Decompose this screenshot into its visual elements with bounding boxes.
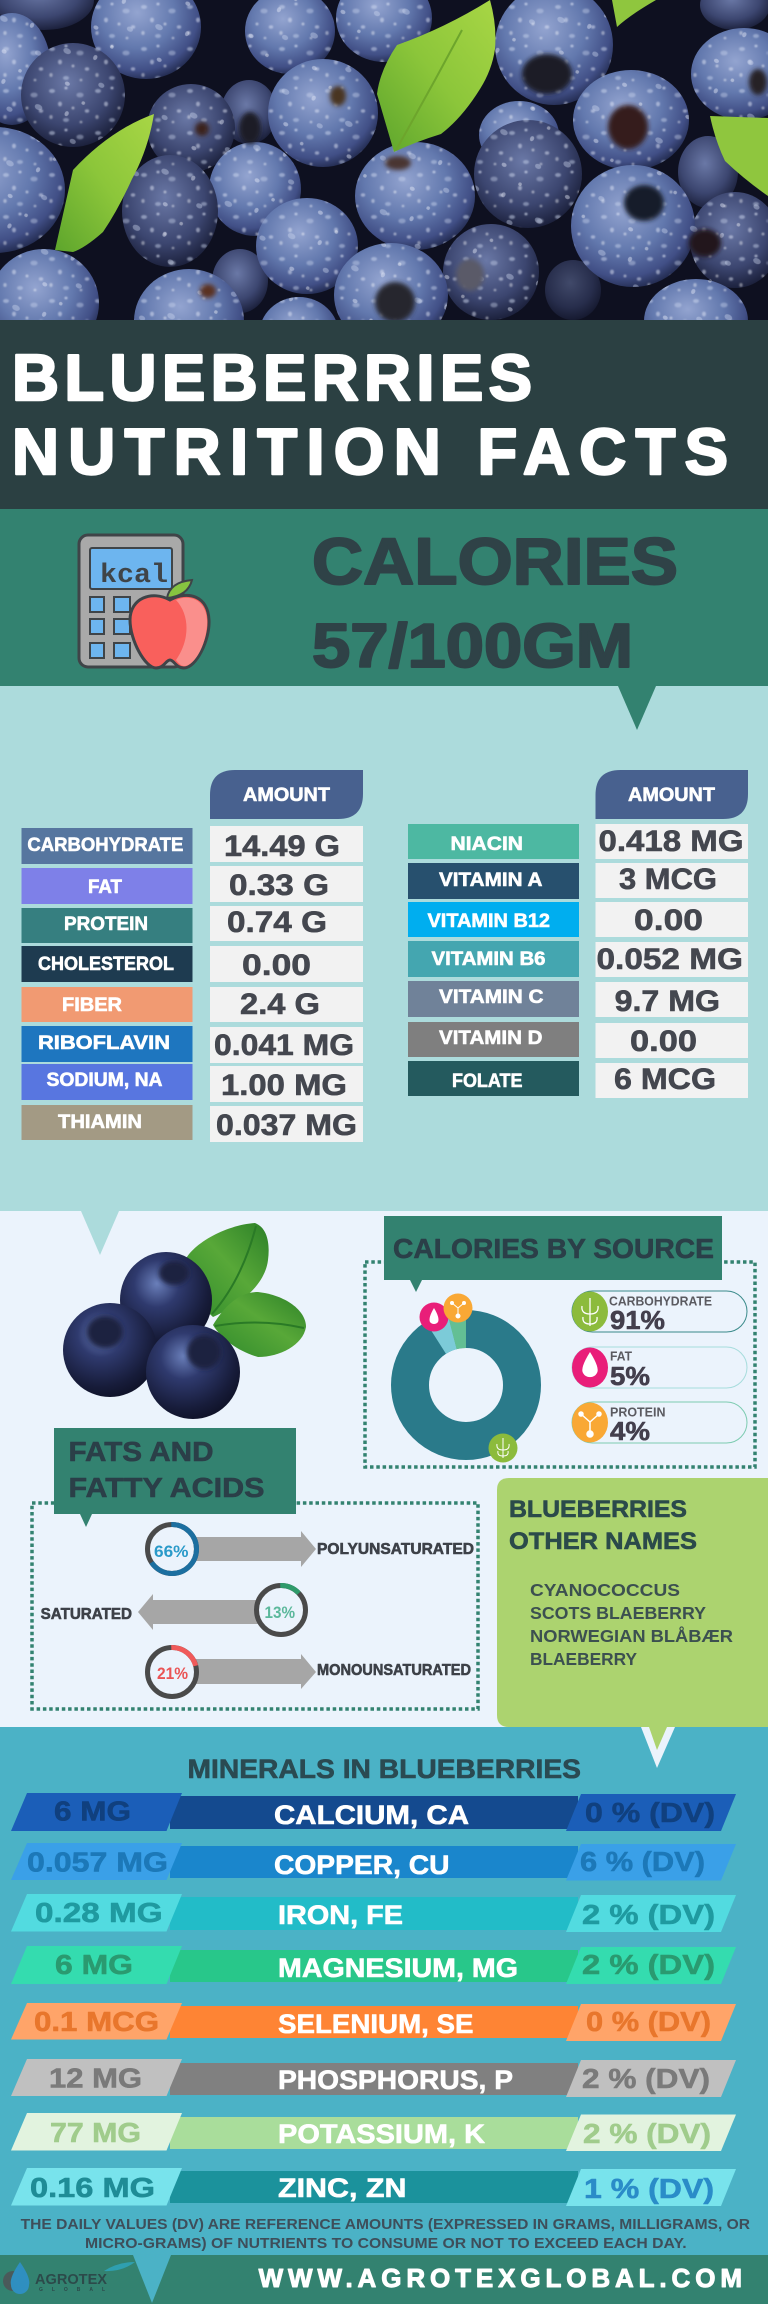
table: macronutrients: FAT [88, 877, 122, 898]
logo: agrotex global: GLOBAL [39, 2287, 105, 2293]
heading: other names [509, 1496, 697, 1555]
icon: calculator and apple [79, 535, 209, 668]
mineral row: selenium: SELENIUM, SE [278, 2009, 474, 2039]
panel: nutrient amounts [0, 686, 768, 1211]
table: vitamins: VITAMIN B6 [432, 949, 546, 970]
table: macronutrients: THIAMIN [58, 1112, 142, 1133]
calories heading [312, 524, 678, 681]
table: macronutrients [22, 770, 363, 1142]
mineral row: zinc: 1 % (DV) [584, 2173, 714, 2204]
table: vitamins: VITAMIN C [439, 987, 544, 1008]
mineral row: magnesium: 6 MG [55, 1949, 133, 1980]
table: macronutrients: 0.037 MG [216, 1109, 357, 1142]
mineral row: calcium [11, 1793, 736, 1831]
mineral row: selenium: 0.1 MCG [34, 2006, 159, 2037]
list: other names: SCOTS BLAEBERRY [530, 1603, 706, 1623]
mineral row: phosphorus: 2 % (DV) [582, 2063, 710, 2094]
table: vitamins: 9.7 MG [615, 985, 720, 1018]
mineral row: calcium: 0 % (DV) [585, 1797, 715, 1828]
mineral row: potassium [11, 2113, 736, 2151]
mineral row: copper [11, 1843, 736, 1880]
website url: WWW.AGROTEXGLOBAL.COM [259, 2263, 742, 2293]
note: daily values: THE DAILY VALUES (DV) ARE REFERENCE AMOUNTS (EXPRESSED IN GRAMS, MILLIGRAMS, OR [21, 2216, 750, 2233]
mineral row: copper: 0.057 MG [27, 1846, 168, 1878]
arrow: monounsaturated 21% [148, 1648, 471, 1696]
mineral row: zinc: 0.16 MG [30, 2172, 155, 2203]
panel: sources and fats [0, 1211, 768, 1727]
header band [0, 320, 768, 509]
legend: protein: PROTEIN [610, 1406, 666, 1420]
panel: minerals [0, 1727, 768, 2255]
heading: minerals: MINERALS IN BLUEBERRIES [188, 1754, 581, 1784]
mineral row: selenium: 0 % (DV) [586, 2006, 711, 2037]
mineral row: zinc: ZINC, ZN [278, 2173, 406, 2203]
table: vitamins: 0.418 MG [598, 825, 744, 858]
mineral row: iron: 0.28 MG [35, 1897, 163, 1928]
icon: calculator and apple: kcal [100, 561, 168, 591]
arrow: other names pointer [641, 1727, 675, 1768]
heading: fats and fatty acids: FATTY ACIDS [68, 1472, 264, 1503]
photo: blueberries with leaves [0, 0, 768, 320]
logo: agrotex global: AGROTEX [35, 2272, 107, 2288]
legend: carbohydrate: CARBOHYDRATE [609, 1294, 712, 1308]
calories heading: CALORIES [312, 524, 678, 598]
legend: protein [572, 1402, 747, 1446]
arrow: monounsaturated 21%: MONOUNSATURATED [317, 1662, 471, 1679]
table: macronutrients: 0.33 G [229, 869, 329, 902]
legend: carbohydrate [572, 1291, 747, 1335]
note: daily values [21, 2216, 750, 2252]
table: vitamins: 0.00 [634, 904, 703, 937]
icon: fat badge [420, 1302, 448, 1332]
legend: fat: 5% [610, 1361, 650, 1391]
mineral row: magnesium: 2 % (DV) [582, 1949, 715, 1980]
mineral row: magnesium [11, 1946, 736, 1984]
mineral row: selenium [11, 2003, 736, 2041]
arrow: footer pointer [133, 2255, 171, 2303]
list: other names: NORWEGIAN BLÅBÆR [530, 1626, 733, 1646]
chart: calories by source [365, 1216, 755, 1467]
table: vitamins: VITAMIN D [439, 1028, 542, 1049]
legend: fat: FAT [610, 1350, 632, 1364]
table: macronutrients: CHOLESTEROL [38, 954, 174, 975]
list: other names: BLAEBERRY [530, 1649, 637, 1669]
arrow: saturated 13%: 13% [264, 1603, 295, 1622]
table: vitamins: 0.00 [630, 1025, 697, 1058]
arrow: pointer from nutrient panel [81, 1211, 119, 1255]
legend: protein: 4% [610, 1416, 650, 1446]
amount header left: AMOUNT [243, 785, 330, 806]
illustration: three blueberries with leaves [63, 1223, 306, 1419]
table: macronutrients: 2.4 G [240, 988, 320, 1021]
mineral row: iron: IRON, FE [278, 1900, 403, 1930]
calories heading: 57/100GM [312, 612, 633, 681]
arrow: calories pointer [618, 686, 656, 730]
title: BLUEBERRIES [12, 341, 532, 414]
mineral row: iron: 2 % (DV) [582, 1899, 715, 1930]
heading: calories by source: CALORIES BY SOURCE [393, 1233, 714, 1264]
mineral row: calcium: CALCIUM, CA [274, 1800, 469, 1830]
heading: other names: BLUEBERRIES [509, 1496, 687, 1523]
donut chart [389, 1294, 543, 1462]
amount header right [596, 770, 748, 819]
chart: fats and fatty acids [32, 1428, 478, 1709]
footer band [0, 2255, 768, 2304]
list: other names: CYANOCOCCUS [530, 1580, 680, 1600]
table: macronutrients: 0.041 MG [214, 1029, 354, 1062]
icon: carbohydrate badge [488, 1434, 518, 1462]
mineral row: phosphorus: PHOSPHORUS, P [278, 2065, 513, 2095]
amount header right: AMOUNT [628, 785, 715, 806]
table: vitamins: FOLATE [452, 1071, 522, 1092]
mineral row: calcium: 6 MG [54, 1796, 131, 1826]
heading: fats and fatty acids [54, 1428, 296, 1527]
mineral row: iron [11, 1894, 736, 1932]
mineral row: phosphorus [11, 2059, 736, 2097]
table: macronutrients: PROTEIN [64, 914, 148, 935]
arrow: saturated 13% [41, 1586, 305, 1634]
panel: calories [0, 509, 768, 730]
panel: other names [497, 1478, 768, 1768]
icon: protein badge [444, 1294, 472, 1322]
table: macronutrients: 0.00 [242, 949, 311, 982]
arrow: polyunsaturated 66%: POLYUNSATURATED [317, 1541, 474, 1558]
table: vitamins: NIACIN [450, 834, 523, 855]
title: NUTRITION FACTS [12, 415, 728, 488]
table: macronutrients: RIBOFLAVIN [38, 1033, 170, 1054]
arrow: saturated 13%: SATURATED [41, 1606, 132, 1623]
table: vitamins: 0.052 MG [596, 943, 743, 976]
heading: other names: OTHER NAMES [509, 1528, 697, 1555]
list: other names [530, 1580, 733, 1669]
mineral row: potassium: 77 MG [50, 2117, 141, 2148]
heading: fats and fatty acids: FATS AND [68, 1436, 214, 1467]
table: vitamins [408, 770, 748, 1098]
arrow: polyunsaturated 66% [148, 1524, 474, 1574]
arrow: monounsaturated 21%: 21% [157, 1664, 188, 1683]
legend: carbohydrate: 91% [610, 1305, 665, 1335]
mineral row: copper: COPPER, CU [274, 1850, 450, 1880]
table: macronutrients: SODIUM, NA [46, 1070, 163, 1091]
mineral row: copper: 6 % (DV) [580, 1846, 705, 1877]
arrow: polyunsaturated 66%: 66% [154, 1542, 188, 1561]
table: vitamins: VITAMIN B12 [428, 911, 550, 932]
mineral row: potassium: POTASSIUM, K [278, 2119, 486, 2149]
table: vitamins: 3 MCG [619, 863, 717, 896]
logo: agrotex global [3, 2262, 135, 2294]
mineral row: magnesium: MAGNESIUM, MG [278, 1953, 518, 1983]
table: macronutrients: 1.00 MG [221, 1069, 347, 1102]
note: daily values: MICRO-GRAMS) OF NUTRIENTS TO CONSUME OR NOT TO EXCEED EACH DAY. [85, 2235, 687, 2252]
table: macronutrients: CARBOHYDRATE [27, 835, 183, 856]
mineral row: zinc [11, 2168, 736, 2206]
table: macronutrients: FIBER [62, 995, 122, 1016]
table: vitamins: 6 MCG [614, 1063, 716, 1096]
table: macronutrients: 14.49 G [224, 830, 340, 863]
legend: fat [572, 1347, 747, 1391]
amount header left [210, 770, 363, 819]
table: vitamins: VITAMIN A [439, 870, 543, 891]
heading: calories by source [384, 1216, 722, 1292]
title [12, 341, 728, 488]
table: macronutrients: 0.74 G [227, 906, 327, 939]
mineral row: phosphorus: 12 MG [49, 2062, 142, 2094]
mineral row: potassium: 2 % (DV) [583, 2118, 711, 2149]
